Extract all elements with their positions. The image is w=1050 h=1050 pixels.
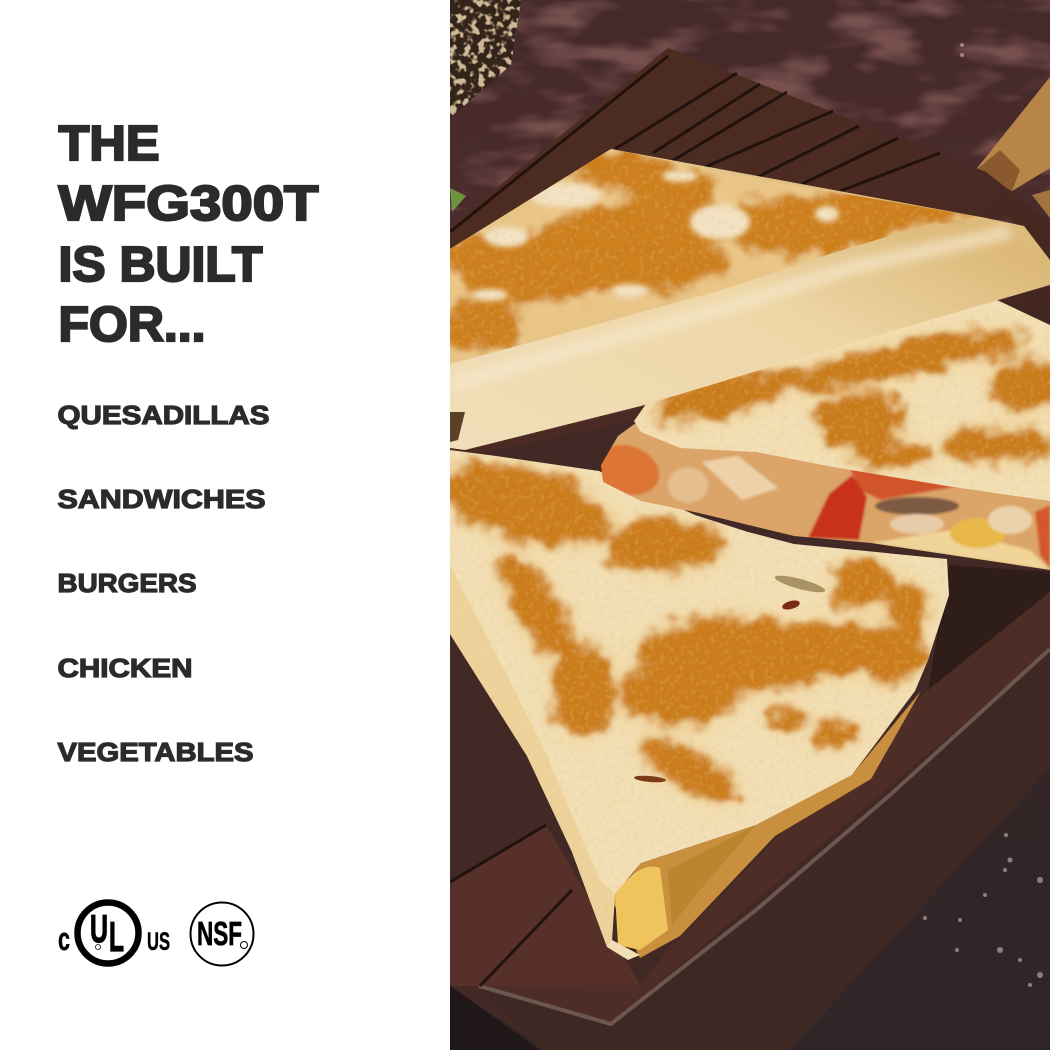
rim highlight [479, 649, 1050, 1024]
shell outline and base [450, 450, 949, 960]
front rim [479, 592, 1050, 1024]
mushroom [890, 514, 944, 534]
lower left red plank [450, 825, 640, 986]
item: chicken: CHICKEN [58, 653, 192, 683]
cheese [615, 866, 668, 950]
left shell side shading [450, 565, 615, 947]
bread loaf at top-left [450, 0, 525, 120]
dark bottom corner [450, 986, 540, 1050]
filling [601, 423, 1050, 570]
grooves [450, 56, 940, 986]
dark shadow inside [875, 497, 959, 515]
food list [58, 400, 270, 767]
quesadilla wedge: right with filling [590, 300, 1050, 580]
tomato piece [808, 475, 867, 540]
board surface [450, 48, 1050, 1050]
certification logo: cULus: US [147, 928, 170, 956]
wooden board [450, 48, 1050, 1050]
herb on shell [774, 572, 826, 596]
wedge side [450, 149, 1050, 450]
photo: quesadillas on a wooden board [450, 0, 1050, 1050]
orange sauce [850, 468, 960, 500]
title: THE [58, 117, 160, 171]
shell base [634, 300, 1050, 501]
certification logo: cULus: L [109, 913, 124, 960]
char mark [450, 412, 465, 442]
left text panel [56, 117, 320, 967]
toasted top surface [450, 149, 986, 364]
item: quesadillas: QUESADILLAS [58, 400, 270, 430]
rim front face [479, 649, 1050, 1050]
title: FOR... [58, 298, 206, 352]
table background [450, 0, 1050, 1050]
certification logo: cULus: c [58, 921, 70, 957]
bright fold highlight [450, 232, 1010, 385]
toasted blotches [450, 451, 948, 892]
title: IS BUILT [58, 238, 263, 292]
item: sandwiches: SANDWICHES [58, 484, 266, 514]
title [58, 117, 319, 352]
item: burgers: BURGERS [58, 568, 196, 598]
table reddish mottling [450, 0, 1050, 210]
upper plank tone [450, 48, 1050, 460]
chicken piece [702, 456, 778, 500]
shell toasted blotches [630, 300, 1050, 500]
quesadilla wedge: bottom [450, 450, 949, 960]
shrimp [601, 444, 660, 496]
herb sprig [450, 188, 466, 212]
dark area beyond the right wedge [928, 565, 1050, 690]
char flake [634, 775, 666, 783]
lower crust [612, 691, 921, 958]
chili flake [781, 599, 801, 611]
wooden handle [974, 77, 1050, 218]
certification logo: NSF [190, 902, 254, 966]
item: vegetables: VEGETABLES [58, 737, 254, 767]
title: WFG300T [58, 177, 319, 231]
flour specks on the table [923, 43, 1043, 987]
certification logo: cULus: U [90, 908, 108, 951]
cheese chunks [871, 530, 1050, 570]
quesadilla wedge: top [438, 139, 1050, 450]
certification logo: cULus [58, 902, 170, 964]
certification logo: NSF: NSF [197, 915, 242, 952]
